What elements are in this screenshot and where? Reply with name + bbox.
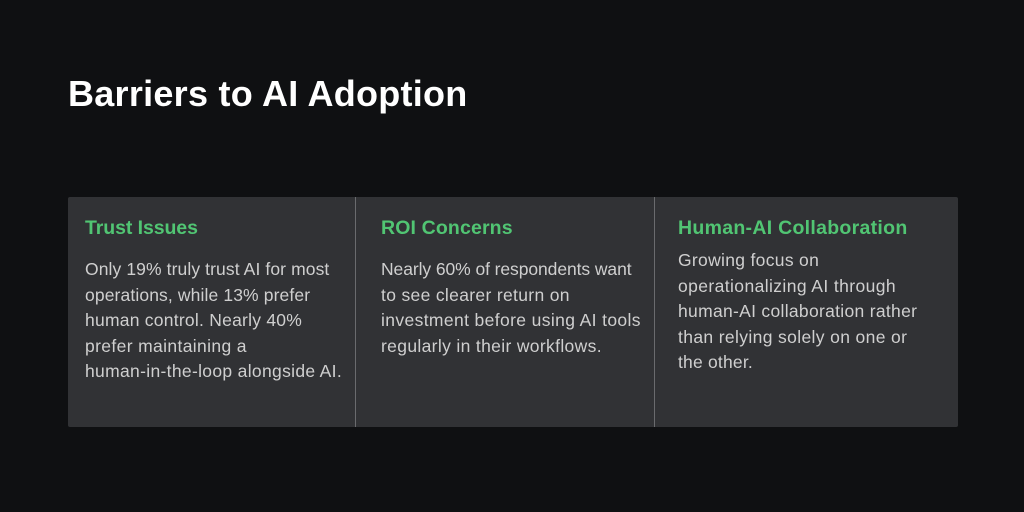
text: roi concerns: Nearly 60% of respondents want bbox=[381, 259, 632, 279]
panel: barriers table bbox=[68, 197, 958, 427]
text: human-ai collaboration bbox=[678, 250, 917, 372]
text: human-ai collaboration: than relying solely on one or bbox=[678, 326, 907, 346]
heading: trust issues: Trust Issues bbox=[85, 217, 198, 239]
column divider: 1 bbox=[355, 197, 356, 427]
text: trust issues: human control. Nearly 40% bbox=[85, 310, 302, 330]
title: Barriers to AI Adoption bbox=[68, 73, 468, 114]
text: roi concerns bbox=[381, 259, 641, 356]
text: human-ai collaboration: Growing focus on bbox=[678, 250, 819, 270]
column divider: 2 bbox=[654, 197, 655, 427]
text: trust issues: prefer maintaining a bbox=[85, 336, 247, 356]
heading: roi concerns: ROI Concerns bbox=[381, 217, 513, 239]
text: roi concerns: to see clearer return on bbox=[381, 284, 570, 304]
text: trust issues: human-in-the-loop alongside AI. bbox=[85, 361, 342, 381]
text: human-ai collaboration: operationalizing AI through bbox=[678, 276, 896, 296]
text: trust issues: operations, while 13% prefer bbox=[85, 284, 310, 304]
text: trust issues: Only 19% truly trust AI for most bbox=[85, 259, 329, 279]
text: human-ai collaboration: the other. bbox=[678, 352, 753, 372]
text: roi concerns: regularly in their workflows. bbox=[381, 336, 602, 356]
heading: human-ai collaboration: Human-AI Collaboration bbox=[678, 217, 908, 239]
text: trust issues bbox=[85, 259, 342, 381]
text: roi concerns: investment before using AI tools bbox=[381, 310, 641, 330]
text: human-ai collaboration: human-AI collaboration rather bbox=[678, 301, 917, 321]
